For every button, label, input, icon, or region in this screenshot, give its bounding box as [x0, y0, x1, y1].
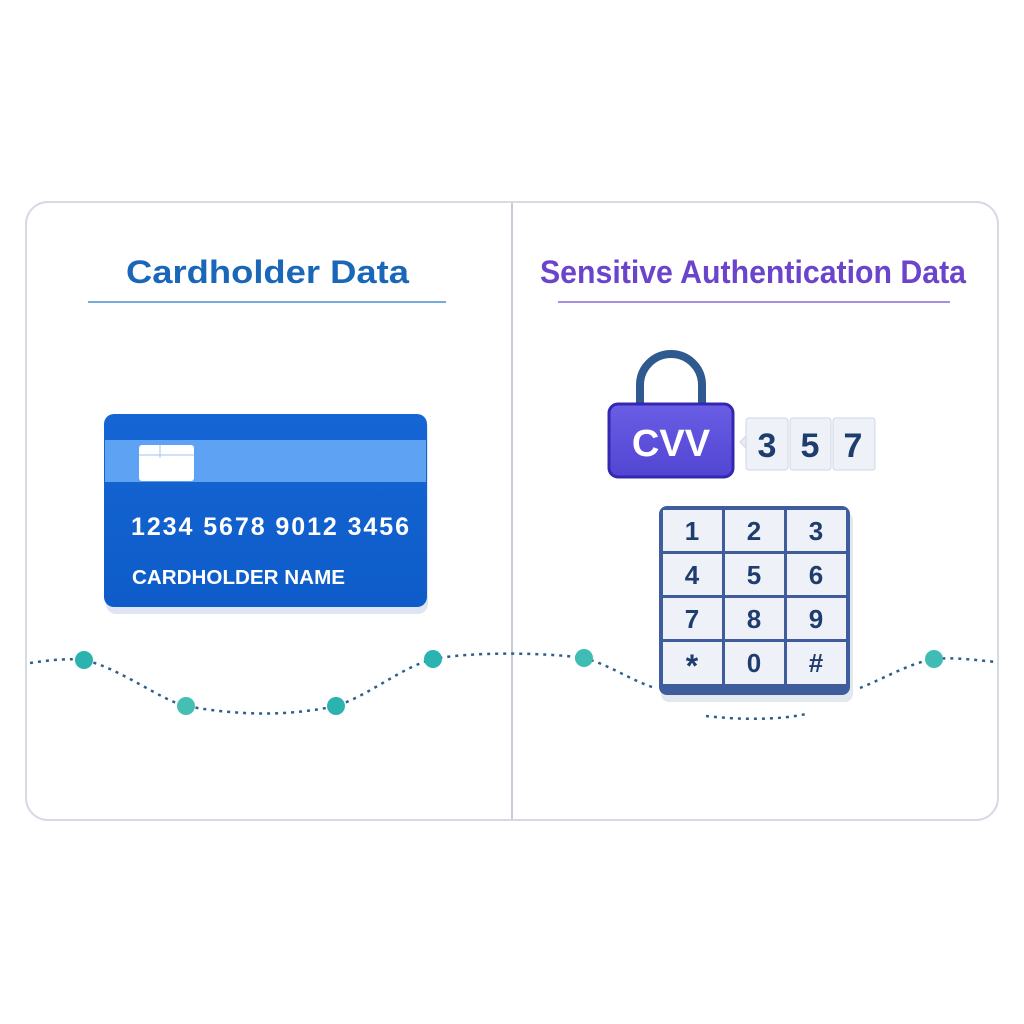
CVV digits 357: 3 — [758, 427, 776, 465]
heading: Cardholder Data: Cardholder Data — [126, 254, 409, 290]
keypad: 5 — [747, 560, 761, 590]
keypad: 4 — [685, 560, 700, 590]
keypad: 2 — [747, 516, 761, 546]
icon: CVV lock — [609, 354, 733, 477]
CVV digits 357: 7 — [844, 427, 862, 465]
icon: CVV lock: CVV — [632, 423, 711, 465]
credit card: CARDHOLDER NAME — [132, 567, 345, 589]
dotted wave connector — [30, 649, 996, 719]
keypad: 3 — [809, 516, 823, 546]
keypad: 6 — [809, 560, 823, 590]
CVV digits 357 — [740, 418, 875, 470]
CVV digits 357: 5 — [801, 427, 819, 465]
keypad — [659, 506, 853, 702]
credit card — [104, 414, 428, 614]
keypad: 1 — [685, 516, 699, 546]
keypad: * — [686, 648, 699, 684]
keypad: 9 — [809, 604, 823, 634]
keypad: 0 — [747, 648, 761, 678]
credit card: 1234 5678 9012 3456 — [131, 513, 409, 541]
heading: Sensitive Authentication Data: Sensitive Authentication Data — [540, 254, 966, 290]
keypad: 7 — [685, 604, 699, 634]
panel: outer frame — [26, 202, 998, 820]
keypad: 8 — [747, 604, 761, 634]
keypad: # — [809, 648, 824, 678]
